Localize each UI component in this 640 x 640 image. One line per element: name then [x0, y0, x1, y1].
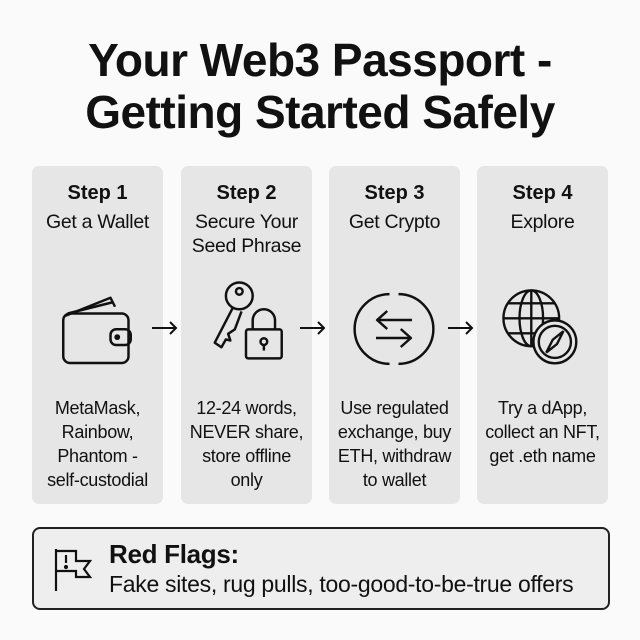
panel: step 4: [477, 166, 608, 504]
step 1 subtitle: Get a Wallet: [46, 211, 149, 233]
step 4 text: [485, 398, 600, 466]
icon: wallet: [62, 296, 132, 364]
icon: warning flag: [54, 549, 92, 591]
step 2 text: NEVER share,: [190, 422, 303, 442]
step 4 heading: Step 4: [512, 182, 573, 204]
step 4 subtitle: Explore: [510, 211, 575, 233]
title: Your Web3 Passport -: [88, 34, 552, 86]
step 1 text: MetaMask,: [55, 398, 140, 418]
step 3 subtitle: Get Crypto: [349, 211, 440, 233]
red flags heading: Red Flags:: [109, 539, 239, 569]
step 1 text: [47, 398, 148, 490]
step 3 text: to wallet: [363, 470, 426, 490]
step 1 text: Rainbow,: [62, 422, 133, 442]
step 3 text: [338, 398, 452, 490]
panel: step 3: [329, 166, 460, 504]
step 2 subtitle: [192, 211, 301, 257]
arrow 2: [300, 321, 326, 335]
title: Getting Started Safely: [85, 86, 555, 138]
step 4 text: get .eth name: [489, 446, 596, 466]
step 1 text: Phantom -: [57, 446, 138, 466]
panel: step 1: [32, 166, 163, 504]
step 4 text: collect an NFT,: [485, 422, 600, 442]
red flags box: [32, 527, 610, 610]
step 2 heading: Step 2: [216, 182, 277, 204]
step 4 text: Try a dApp,: [498, 398, 587, 418]
arrow 1: [152, 321, 178, 335]
icon: key and lock: [214, 281, 283, 360]
step 2 text: [190, 398, 303, 490]
icon: globe and compass: [502, 289, 578, 364]
step 2 text: only: [231, 470, 262, 490]
step 2 text: store offline: [202, 446, 291, 466]
icon: exchange: [353, 292, 435, 366]
step 3 text: Use regulated: [340, 398, 449, 418]
red flags text: Fake sites, rug pulls, too-good-to-be-true offers: [109, 571, 573, 597]
step 3 text: exchange, buy: [338, 422, 451, 442]
step 1 text: self-custodial: [47, 470, 148, 490]
step 3 heading: Step 3: [364, 182, 425, 204]
arrow 3: [448, 321, 474, 335]
step 2 text: 12-24 words,: [196, 398, 297, 418]
step 1 heading: Step 1: [67, 182, 128, 204]
title: [85, 34, 555, 138]
step 2 subtitle: Seed Phrase: [192, 235, 301, 257]
step 2 subtitle: Secure Your: [195, 211, 298, 233]
panel: step 2: [181, 166, 312, 504]
step 3 text: ETH, withdraw: [338, 446, 451, 466]
